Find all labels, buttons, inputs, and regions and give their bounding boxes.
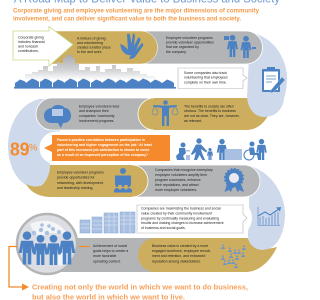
text: networking: networking, skill development, (57, 181, 104, 185)
ribbon: gold band 3 (138, 98, 270, 130)
text: employee volunteers lead: and champion their (79, 109, 110, 113)
arrow callout: corporate giving: includes financial (18, 40, 45, 44)
text: employee volunteers lead: involvement programs. (79, 119, 114, 123)
text: benefits to society: as relevant. (184, 119, 202, 123)
callout: orange correlation box: as a result of an improved perception of the company.² (57, 153, 149, 157)
callout: orange correlation box: Found a positive correlation between participation in (57, 138, 145, 142)
text: mixture: A mixture of giving (77, 36, 106, 40)
ribbon: gray band 1 (140, 31, 262, 64)
skyline (25, 55, 155, 80)
icon: clipboard and pen (262, 67, 285, 93)
text: networking: provide opportunities for (57, 176, 95, 180)
arrow callout: corporate giving (13, 26, 73, 66)
arrow callout: corporate giving: contributions. (18, 49, 39, 53)
buildings (80, 212, 135, 233)
globe with people (17, 214, 77, 274)
text: achievement of social goals: operating context. (93, 260, 121, 264)
conclusion statement (32, 282, 248, 300)
arrow: orange connector to conclusion (9, 246, 29, 290)
text: business value: ment and retention, and enhanced (152, 254, 205, 258)
icon: award badge (224, 169, 244, 192)
icon: chat cloud (44, 105, 71, 128)
ribbon: right blue curve lower (248, 166, 285, 250)
icon: volunteers with tools (224, 35, 256, 58)
text: business value: Business value is created by a more (152, 244, 208, 248)
conclusion statement: Creating not only the world in which we want to do business, (32, 282, 248, 292)
text: employee volunteer programs: that are organized by (166, 45, 199, 49)
icons: volunteers helping (176, 138, 267, 160)
text: employee volunteers lead: companies' community (79, 114, 115, 118)
text: employee volunteer programs: Employee volunteer programs (166, 36, 213, 40)
text: recognize volunteers: more employee volunteers. (155, 188, 197, 192)
text: benefits to society (184, 104, 240, 123)
text: business value (152, 244, 212, 264)
text: achievement of social goals: Achievement of social (93, 244, 127, 248)
arrow callout: corporate giving: and noncash (18, 44, 38, 48)
houses row (14, 78, 176, 89)
text: employee volunteer programs: provide volunteer opportunities (166, 40, 214, 44)
callout: track volunteering: Some companies also track (184, 71, 227, 75)
text: achievement of social goals (93, 244, 128, 264)
text: employee volunteer programs (166, 36, 214, 54)
icon: hand (120, 33, 143, 59)
text: business value: reputation among stakeholders. (152, 260, 201, 264)
text: achievement of social goals: goals helps to create a (93, 249, 128, 253)
ribbon: white band middle (40, 132, 300, 164)
callout: maximizing value: results and making changes to increase achievement (141, 221, 224, 225)
text: employee volunteer programs: the company. (166, 50, 187, 54)
icon: leader and team (114, 168, 132, 192)
ribbon: gold band 6 (138, 238, 277, 272)
callout: maximizing value: of business and social goals. (141, 226, 186, 230)
text: mixture: to live and work. (77, 50, 102, 54)
text: networking: and leadership training. (57, 186, 93, 190)
ribbon: gray band 6 (60, 238, 156, 272)
text: recognize volunteers: employee volunteers amplify their (155, 173, 208, 177)
ribbon: lobe of blue over gold (247, 97, 284, 117)
text: benefits to society: The benefits to society are often (184, 104, 234, 108)
text: benefits to society: are not as clear. They are, however, (184, 114, 240, 118)
ribbon: right blue curve upper (247, 33, 287, 117)
callout: track volunteering: volunteering that employees (184, 76, 228, 80)
callout: maximizing value: value created by their community involvement (141, 212, 212, 216)
ribbon: white band 2 (0, 64, 246, 97)
callout: orange correlation box: part of this increased job satisfaction is shown to come (57, 148, 149, 152)
text: mixture: and volunteering (77, 41, 103, 45)
text: networking (57, 170, 104, 190)
text: recognize volunteers: Companies that recognize exemplary (155, 168, 213, 172)
ribbon: gray band 4 (132, 165, 260, 197)
text: business value: engaged workforce, employee recruit- (152, 249, 212, 253)
ribbon: white band 5 (0, 198, 252, 238)
stat: 89%: % (29, 142, 38, 154)
icon: group of stakeholders (221, 244, 246, 268)
text: benefits to society: obvious. The benefits to business (184, 109, 236, 113)
text: recognize volunteers (155, 168, 213, 192)
connector: orange dash (79, 246, 90, 248)
ribbon: left blue curve (8, 99, 60, 187)
text: employee volunteers lead (79, 104, 119, 123)
subheading: involvement, and can deliver significant value to both the business and society. (13, 16, 241, 22)
ribbon: gold band 1 (50, 31, 158, 64)
ribbon: gold band 4 (26, 165, 148, 197)
text: recognize volunteers: program successes, enhance (155, 178, 201, 182)
text: mixture (77, 36, 111, 54)
subheading (13, 8, 260, 22)
text: employee volunteers lead: Employee volunteers lead (79, 104, 119, 108)
subheading: Corporate giving and employee volunteering are the major dimensions of community (13, 8, 260, 14)
icon: line chart (258, 207, 281, 226)
stat: 89%: 89 (10, 138, 30, 160)
callout: maximizing value (137, 205, 247, 233)
callout: track volunteering (178, 68, 247, 88)
text: mixture: creates a better place (77, 46, 111, 50)
icon: person with scales (152, 100, 178, 126)
callout: orange correlation box: volunteering and higher engagement on the job.¹ At least (57, 143, 153, 147)
callout: track volunteering: complete on their own time. (184, 80, 227, 84)
text: recognize volunteers: their reputations, and attract (155, 183, 199, 187)
callout: maximizing value: Companies are maximizing the business and social (141, 206, 221, 210)
arrow callout: corporate giving: Corporate giving (18, 36, 44, 40)
callout: orange correlation box (44, 135, 170, 161)
text: networking: Employee volunteer programs (57, 170, 104, 174)
callout: maximizing value: programs by continually measuring and evaluating (141, 216, 219, 220)
ribbon: gray band 3 (36, 98, 154, 130)
text: achievement of social goals: more favorable (93, 254, 116, 258)
